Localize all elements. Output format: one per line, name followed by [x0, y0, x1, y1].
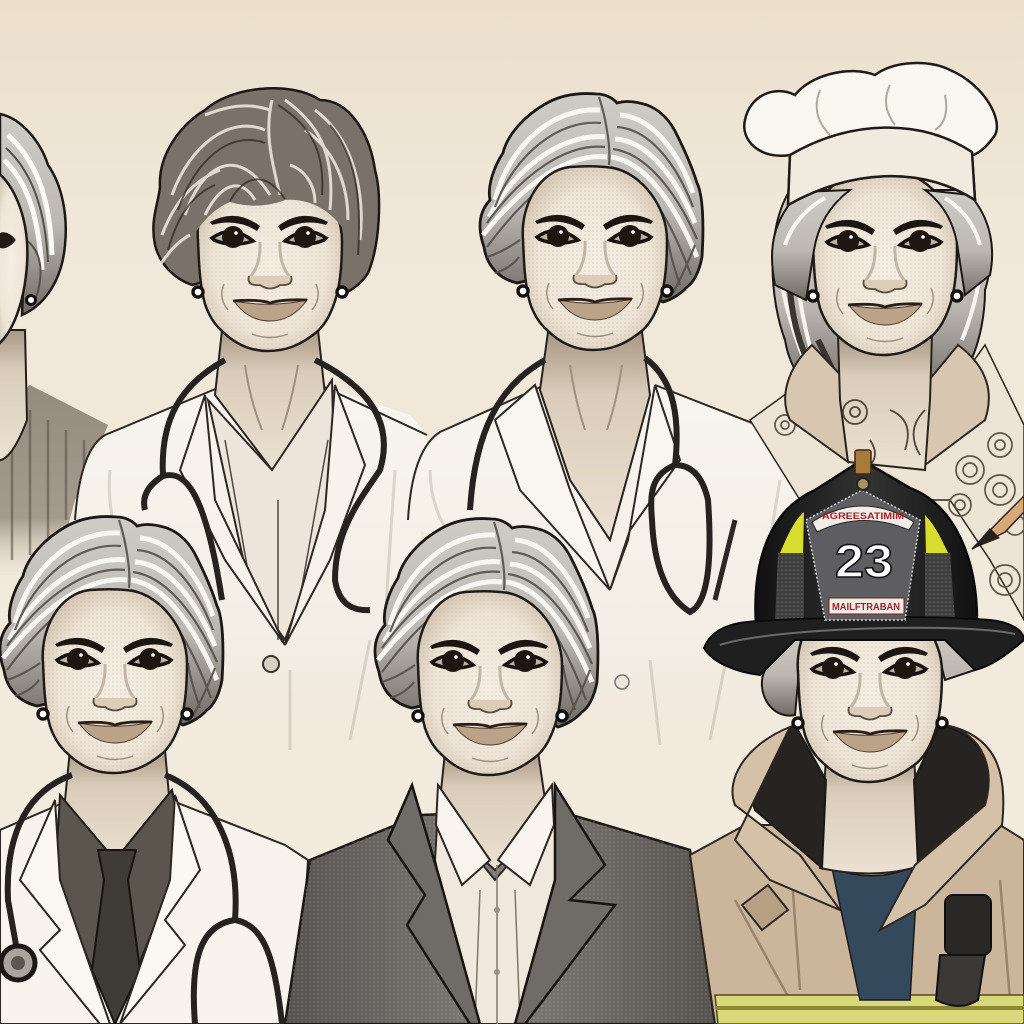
helmet number: 23 [835, 535, 893, 587]
lapels [20, 795, 200, 1024]
top-left neck [0, 330, 27, 460]
portrait: doctor with silver hair, top row centre [408, 94, 800, 755]
jacket collar [785, 345, 989, 465]
helmet: AGREESATIMIM [822, 511, 904, 521]
top-left hair [0, 114, 66, 315]
helmet brim [704, 617, 1024, 675]
hair under helmet [762, 625, 975, 716]
top-left face [0, 170, 27, 347]
jacket with rose tattoos [750, 345, 1024, 620]
helmet: MAILFTRABAN [832, 602, 900, 613]
tattoo pen [972, 496, 1024, 549]
portrait: doctor with tie, bottom row left [0, 517, 308, 1024]
hair [153, 88, 379, 295]
face [413, 591, 567, 775]
face [38, 589, 192, 773]
helmet [704, 450, 1024, 675]
hair [0, 517, 223, 725]
stethoscope [144, 360, 384, 610]
portrait: doctor with dark curly hair, top row left [75, 88, 427, 755]
dark shirt [55, 790, 185, 1024]
chef hat [744, 63, 997, 205]
dark collar [751, 725, 991, 868]
face [793, 598, 947, 782]
tattooed neck [838, 335, 932, 470]
face [808, 171, 962, 355]
coat tab [742, 885, 788, 930]
portrait: chef with tattoos, top row right [744, 63, 1024, 620]
hair strands [160, 100, 361, 265]
portrait: firefighter, bottom row right [690, 450, 1024, 1024]
neck [62, 750, 172, 870]
white coat [0, 800, 308, 1024]
hair side locks [772, 190, 992, 300]
lapels [180, 385, 365, 645]
shield bottom banner [829, 598, 904, 614]
tie [92, 850, 140, 1024]
lapels [495, 385, 680, 590]
suit lapels [388, 785, 615, 1024]
neck [215, 330, 325, 470]
turnout coat [690, 825, 1024, 1024]
white coat [75, 385, 427, 755]
tan collar trim [732, 725, 1003, 930]
helmet crown [755, 460, 977, 625]
coat button [263, 656, 279, 672]
hair back [772, 190, 990, 400]
shirt [435, 810, 560, 1024]
hair [480, 94, 703, 302]
helmet crest [855, 450, 871, 474]
fringe [190, 152, 350, 241]
reflective stripes [715, 995, 1024, 1024]
stethoscope [470, 358, 710, 612]
shield top banner [812, 506, 914, 532]
suit jacket [285, 810, 715, 1024]
portrait: businesswoman in grey suit, bottom row centre [285, 519, 715, 1024]
white coat [408, 385, 800, 755]
blue shirt [832, 865, 918, 1000]
neck [438, 752, 548, 870]
blouse [208, 380, 335, 640]
face [193, 167, 347, 351]
stethoscope [8, 775, 282, 1024]
face [518, 166, 672, 350]
top-left garment [0, 385, 108, 575]
flashlight [936, 895, 991, 1006]
portrait: partial woman at top left [0, 114, 108, 575]
coat button [615, 675, 629, 689]
hair [375, 519, 598, 727]
neck [540, 332, 650, 540]
helmet shield [806, 490, 920, 620]
neck [820, 755, 920, 874]
